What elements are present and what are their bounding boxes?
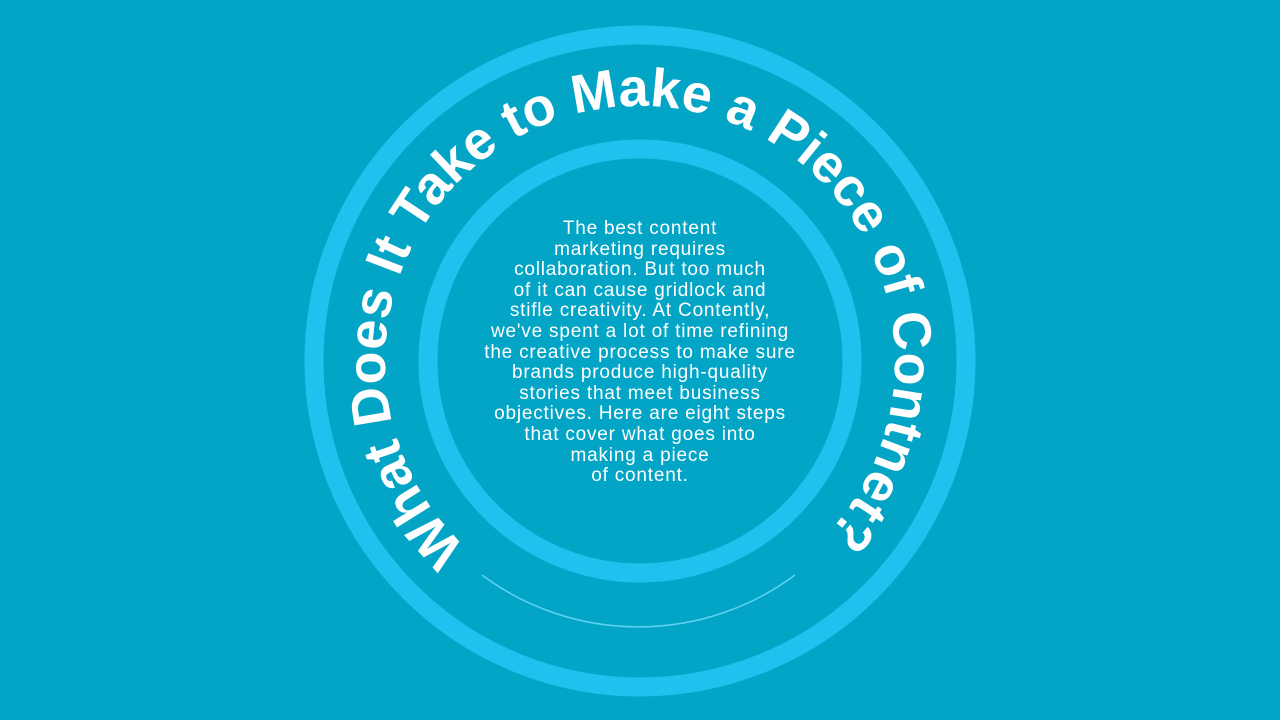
inner ring (428, 149, 852, 573)
intro paragraph: that cover what goes into (524, 424, 756, 445)
intro paragraph: of it can cause gridlock and (514, 280, 766, 301)
intro paragraph: we've spent a lot of time refining (491, 321, 789, 342)
outer ring (314, 35, 966, 687)
intro paragraph: stories that meet business (519, 383, 761, 404)
thin arc (482, 575, 795, 627)
intro paragraph (484, 218, 796, 486)
intro paragraph: brands produce high-quality (512, 362, 768, 383)
intro paragraph: marketing requires (554, 239, 726, 260)
intro paragraph: the creative process to make sure (484, 342, 796, 363)
curved title: What Does It Take to Make a Piece of Contnet? (352, 67, 932, 574)
intro paragraph: making a piece (570, 445, 710, 466)
intro paragraph: stifle creativity. At Contently, (510, 300, 770, 321)
intro paragraph: objectives. Here are eight steps (494, 403, 786, 424)
intro paragraph: The best content (563, 218, 717, 239)
intro paragraph: of content. (591, 465, 689, 486)
intro paragraph: collaboration. But too much (514, 259, 766, 280)
